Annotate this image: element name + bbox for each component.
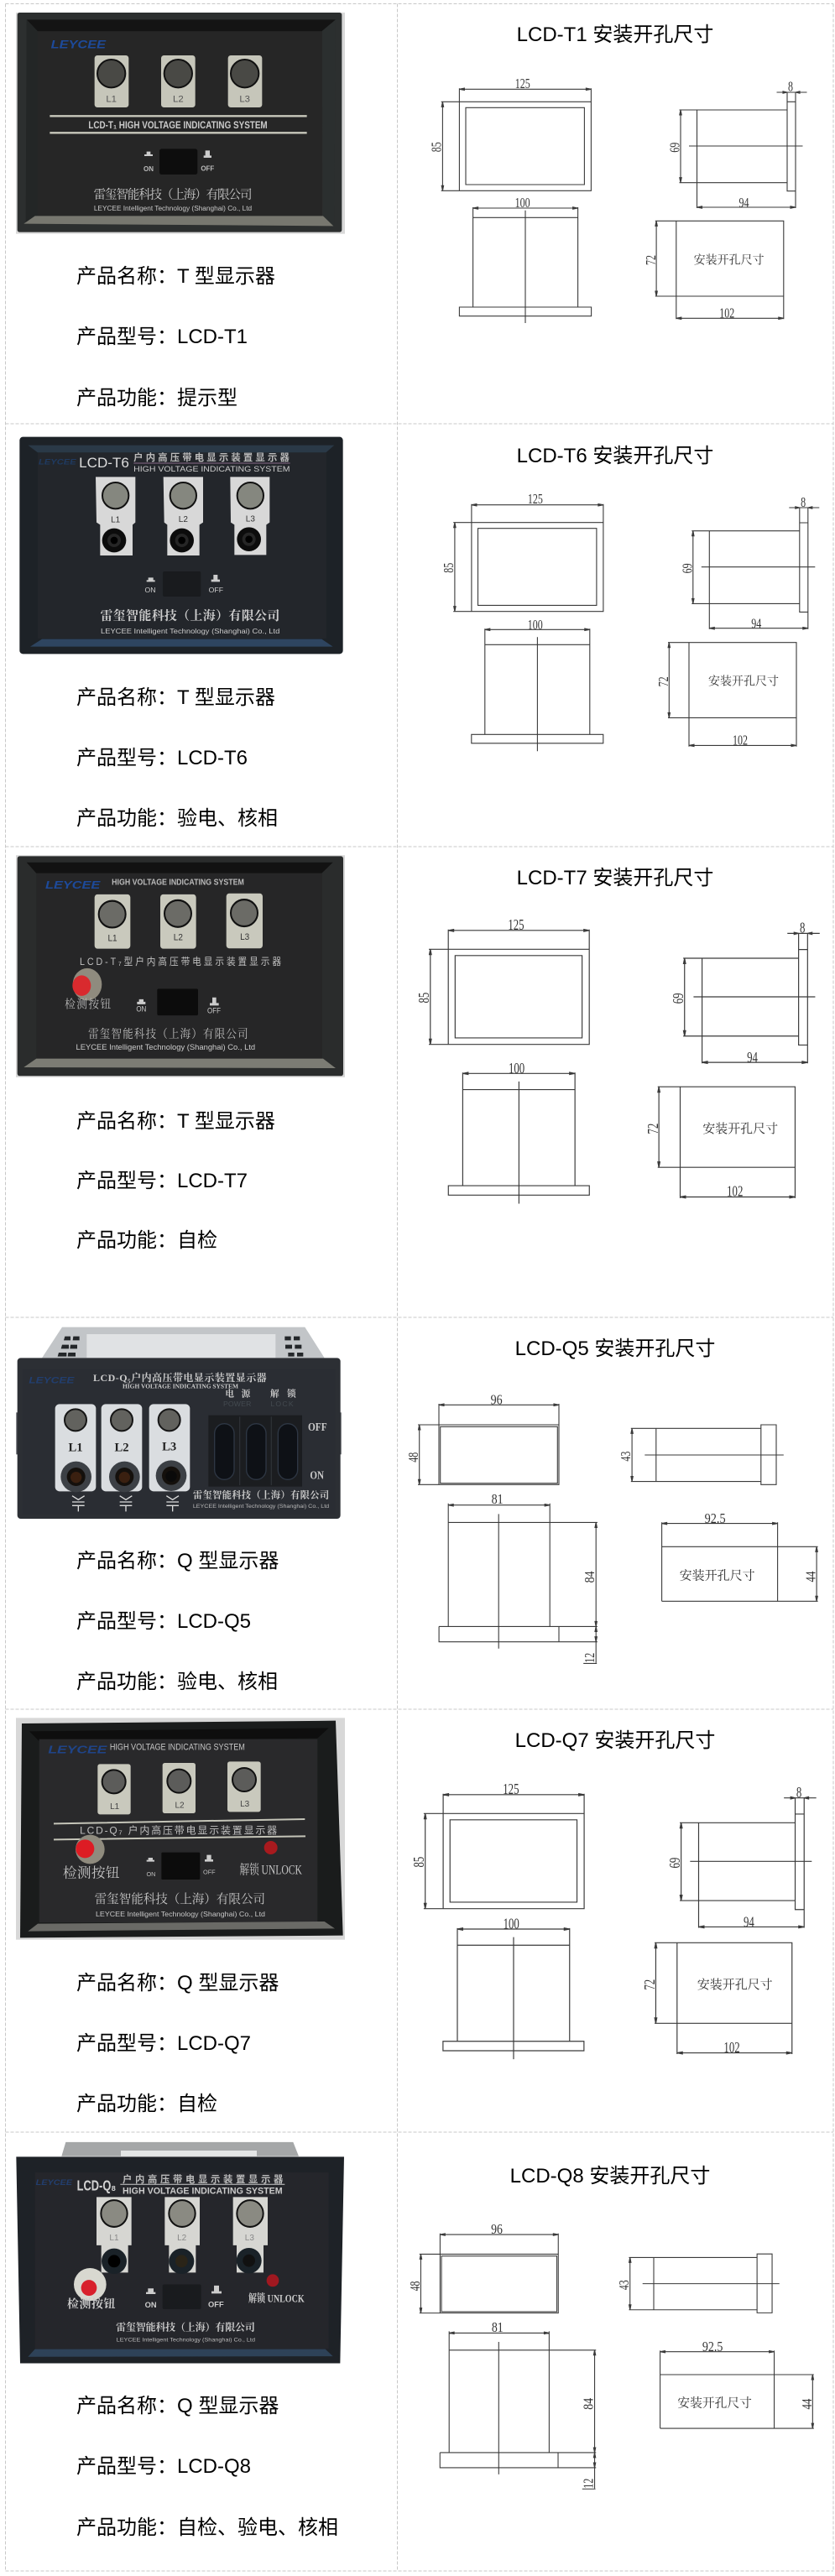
dimension drawing: LCD-T6: 安装开孔尺寸 bbox=[708, 673, 779, 690]
product photo: LCD-Q8: ON bbox=[145, 2300, 157, 2309]
dimension drawing: LCD-Q8: 92.5 bbox=[702, 2339, 723, 2354]
product photo: LCD-T6 bbox=[19, 437, 343, 654]
dimension drawing: LCD-Q5: 96 bbox=[491, 1391, 503, 1407]
dimension drawing: LCD-Q5: 92.5 bbox=[705, 1510, 726, 1526]
product photo: LCD-T7 bbox=[16, 855, 345, 1077]
product photo: LCD-T1: L1 bbox=[106, 95, 117, 105]
product info: LCD-T7 bbox=[76, 1104, 275, 1253]
dimension drawing: LCD-Q8: 81 bbox=[492, 2319, 504, 2335]
product info: LCD-Q8 bbox=[76, 2389, 338, 2540]
product photo: LCD-Q5: HIGH VOLTAGE INDICATING SYSTEM bbox=[123, 1383, 238, 1390]
dimension drawing: LCD-Q7: 85 bbox=[410, 1857, 427, 1868]
product photo: LCD-T1: 雷玺智能科技（上海）有限公司 bbox=[93, 188, 252, 202]
dimension drawing: LCD-Q8: 43 bbox=[616, 2280, 632, 2290]
product photo: LCD-T1: ON bbox=[144, 165, 154, 173]
product photo: LCD-T6: L1 bbox=[111, 515, 121, 524]
product photo: LCD-Q7: L1 bbox=[110, 1802, 120, 1812]
product info: LCD-Q7: 产品功能：自检 bbox=[76, 2087, 217, 2116]
product info: LCD-Q7: 产品型号：LCD-Q7 bbox=[76, 2026, 251, 2056]
dimension drawing: LCD-T1: 69 bbox=[666, 143, 683, 153]
product photo: LCD-Q5: 雷玺智能科技（上海）有限公司 bbox=[193, 1489, 329, 1500]
dimension drawing: LCD-T7: 8 bbox=[800, 920, 805, 936]
panel: LCD-T6 row bbox=[19, 437, 819, 831]
product photo: LCD-T6: 户内高压带电显示装置显示器 bbox=[133, 451, 290, 463]
dimension drawing: LCD-T7: 102 bbox=[727, 1183, 743, 1200]
heading: LCD-T6: LCD-T6 安装开孔尺寸 bbox=[517, 445, 713, 467]
heading: LCD-T7: LCD-T7 安装开孔尺寸 bbox=[517, 867, 713, 889]
product photo: LCD-Q5: L2 bbox=[114, 1441, 129, 1454]
heading: LCD-Q5: LCD-Q5 安装开孔尺寸 bbox=[515, 1338, 715, 1360]
product photo: LCD-T1: LEYCEE Intelligent Technology (Shanghai) Co., Ltd bbox=[94, 205, 252, 212]
dimension drawing: LCD-Q8: 48 bbox=[407, 2281, 423, 2291]
dimension drawing: LCD-Q5: 48 bbox=[405, 1452, 421, 1463]
product photo: LCD-T6: L3 bbox=[246, 515, 255, 524]
product photo: LCD-Q8: LEYCEE bbox=[36, 2177, 73, 2187]
dimension drawing: LCD-T6: 85 bbox=[441, 563, 457, 573]
dimension drawing: LCD-T6: 102 bbox=[733, 733, 748, 748]
product photo: LCD-Q5: POWER bbox=[223, 1400, 251, 1408]
product photo: LCD-T7: LCD-T₇型户内高压带电显示装置显示器 bbox=[80, 956, 281, 967]
product photo: LCD-Q5: OFF bbox=[308, 1421, 327, 1433]
dimension drawing: LCD-T6: 72 bbox=[655, 676, 671, 686]
product info: LCD-T6: 产品功能：验电、核相 bbox=[76, 801, 278, 831]
product photo: LCD-T1: OFF bbox=[201, 164, 214, 172]
product photo: LCD-T7: L2 bbox=[174, 932, 183, 943]
dimension drawing: LCD-Q8: 安装开孔尺寸 bbox=[677, 2393, 752, 2411]
product photo: LCD-Q7: OFF bbox=[203, 1868, 216, 1875]
product info: LCD-T7: 产品功能：自检 bbox=[76, 1223, 217, 1253]
dimension drawing: LCD-T7: 94 bbox=[747, 1049, 758, 1066]
dimension drawing: LCD-T7: 125 bbox=[508, 916, 524, 933]
dimension drawing: LCD-Q8: 96 bbox=[491, 2221, 503, 2237]
product info: LCD-T6: 产品名称：T 型显示器 bbox=[76, 681, 275, 710]
product info: LCD-Q7 bbox=[76, 1966, 279, 2116]
product info: LCD-T1 bbox=[76, 259, 275, 410]
dimension drawing: LCD-T6: 8 bbox=[801, 494, 806, 510]
product photo: LCD-Q7: LEYCEE bbox=[48, 1743, 108, 1755]
product photo: LCD-Q7 bbox=[16, 1718, 345, 1940]
dimension drawing: LCD-T6: 69 bbox=[679, 563, 695, 573]
dimension drawing: LCD-Q7: 安装开孔尺寸 bbox=[697, 1975, 773, 1993]
product photo: LCD-Q5 bbox=[16, 1327, 342, 1519]
product photo: LCD-Q8: LEYCEE Intelligent Technology (Shanghai) Co., Ltd bbox=[117, 2337, 255, 2344]
product photo: LCD-T7: L3 bbox=[240, 931, 249, 942]
dimension drawing: LCD-T1: 85 bbox=[429, 142, 445, 152]
dimension drawing: LCD-Q7: 94 bbox=[744, 1913, 754, 1930]
product photo: LCD-Q8: 雷玺智能科技（上海）有限公司 bbox=[116, 2321, 255, 2334]
product photo: LCD-Q5: L3 bbox=[162, 1441, 176, 1454]
dimension drawing: LCD-Q7 bbox=[410, 1781, 817, 2059]
heading: LCD-Q8: LCD-Q8 安装开孔尺寸 bbox=[510, 2165, 710, 2188]
product photo: LCD-Q8: 户内高压带电显示装置显示器 bbox=[123, 2173, 284, 2185]
product photo: LCD-T6: OFF bbox=[209, 586, 223, 594]
product info: LCD-Q8: 产品名称：Q 型显示器 bbox=[76, 2389, 279, 2418]
dimension drawing: LCD-T1: 8 bbox=[788, 78, 793, 94]
product photo: LCD-T1: LCD-T₁ HIGH VOLTAGE INDICATING SYSTEM bbox=[88, 119, 268, 131]
panel: LCD-T1 row bbox=[16, 13, 806, 410]
product photo: LCD-Q5: L1 bbox=[68, 1441, 83, 1454]
product info: LCD-Q5: 产品型号：LCD-Q5 bbox=[76, 1604, 251, 1634]
product photo: LCD-T7: ON bbox=[136, 1004, 146, 1014]
product photo: LCD-T7: OFF bbox=[207, 1006, 221, 1015]
dimension drawing: LCD-Q5: 12 bbox=[582, 1653, 598, 1663]
product photo: LCD-Q7: 解锁 UNLOCK bbox=[239, 1861, 302, 1877]
product photo: LCD-T7: LEYCEE Intelligent Technology (Shanghai) Co., Ltd bbox=[76, 1043, 255, 1051]
dimension drawing: LCD-T6: 100 bbox=[528, 617, 543, 633]
dimension drawing: LCD-T7 bbox=[415, 916, 820, 1203]
dimension drawing: LCD-T1: 102 bbox=[719, 305, 734, 321]
panel: LCD-T7 row bbox=[16, 855, 820, 1253]
dimension drawing: LCD-T1: 100 bbox=[515, 195, 530, 211]
dimension drawing: LCD-T6 bbox=[441, 491, 819, 751]
product photo: LCD-T6: HIGH VOLTAGE INDICATING SYSTEM bbox=[133, 465, 290, 473]
product photo: LCD-T7: 检测按钮 bbox=[65, 997, 111, 1011]
product photo: LCD-Q5: LOCK bbox=[270, 1400, 294, 1408]
product info: LCD-Q5 bbox=[76, 1544, 279, 1694]
heading: LCD-Q7: LCD-Q7 安装开孔尺寸 bbox=[515, 1729, 715, 1752]
dimension drawing: LCD-Q7: 8 bbox=[796, 1784, 801, 1801]
product photo: LCD-T6: LEYCEE Intelligent Technology (Shanghai) Co., Ltd bbox=[101, 627, 280, 635]
dimension drawing: LCD-Q8: 84 bbox=[581, 2397, 597, 2410]
product info: LCD-Q7: 产品名称：Q 型显示器 bbox=[76, 1966, 279, 1995]
product photo: LCD-T1: LEYCEE bbox=[51, 37, 107, 50]
dimension drawing: LCD-Q7: 100 bbox=[504, 1915, 519, 1932]
heading: LCD-T1: LCD-T1 安装开孔尺寸 bbox=[517, 23, 713, 46]
product photo: LCD-Q7: 雷玺智能科技（上海）有限公司 bbox=[95, 1892, 265, 1906]
product photo: LCD-Q7: 检测按钮 bbox=[63, 1865, 120, 1881]
product photo: LCD-Q7: L2 bbox=[175, 1801, 185, 1810]
product photo: LCD-Q8: 解锁 UNLOCK bbox=[248, 2292, 305, 2305]
product info: LCD-T7: 产品名称：T 型显示器 bbox=[76, 1104, 275, 1134]
dimension drawing: LCD-Q5: 84 bbox=[582, 1571, 598, 1583]
product photo: LCD-T7: 雷玺智能科技（上海）有限公司 bbox=[88, 1026, 248, 1040]
dimension drawing: LCD-Q8: 44 bbox=[799, 2398, 815, 2410]
product photo: LCD-Q8: OFF bbox=[208, 2300, 224, 2309]
product photo: LCD-T6: 雷玺智能科技（上海）有限公司 bbox=[100, 608, 279, 623]
product info: LCD-T1: 产品名称：T 型显示器 bbox=[76, 259, 275, 289]
product photo: LCD-Q7: HIGH VOLTAGE INDICATING SYSTEM bbox=[110, 1742, 245, 1752]
dimension drawing: LCD-T6: 94 bbox=[751, 616, 762, 632]
dimension drawing: LCD-T1 bbox=[429, 76, 807, 323]
product info: LCD-Q5: 产品功能：验电、核相 bbox=[76, 1665, 278, 1694]
product info: LCD-T7: 产品型号：LCD-T7 bbox=[76, 1164, 248, 1193]
panel: LCD-Q5 row bbox=[16, 1327, 819, 1694]
dimension drawing: LCD-T1: 安装开孔尺寸 bbox=[694, 251, 765, 268]
product photo: LCD-Q8 bbox=[16, 2142, 344, 2364]
dimension drawing: LCD-T7: 100 bbox=[509, 1060, 524, 1077]
product photo: LCD-Q7: L3 bbox=[240, 1800, 250, 1809]
product photo: LCD-Q8: HIGH VOLTAGE INDICATING SYSTEM bbox=[123, 2187, 283, 2197]
panel: LCD-Q7 row bbox=[16, 1718, 817, 2116]
dimension drawing: LCD-T7: 安装开孔尺寸 bbox=[702, 1119, 778, 1137]
product photo: LCD-Q7: ON bbox=[146, 1870, 155, 1878]
product photo: LCD-Q8: L3 bbox=[245, 2234, 254, 2243]
dimension drawing: LCD-Q5 bbox=[405, 1391, 819, 1663]
product photo: LCD-Q5: 电源 bbox=[225, 1389, 252, 1400]
dimension drawing: LCD-Q8 bbox=[407, 2221, 815, 2489]
dimension drawing: LCD-Q5: 安装开孔尺寸 bbox=[680, 1566, 755, 1583]
product photo: LCD-Q5: LCD-Q₅户内高压带电显示装置显示器 bbox=[93, 1371, 267, 1384]
product photo: LCD-Q7: LEYCEE Intelligent Technology (Shanghai) Co., Ltd bbox=[96, 1910, 265, 1918]
dimension drawing: LCD-T1: 125 bbox=[515, 76, 530, 91]
product photo: LCD-Q5: LEYCEE bbox=[29, 1376, 75, 1386]
product photo: LCD-Q8: 检测按钮 bbox=[67, 2297, 115, 2312]
dimension drawing: LCD-T6: 125 bbox=[528, 491, 543, 507]
dimension drawing: LCD-Q8: 12 bbox=[581, 2479, 597, 2489]
product photo: LCD-Q8: L2 bbox=[177, 2234, 187, 2243]
product info: LCD-T6 bbox=[76, 681, 278, 831]
product info: LCD-Q8: 产品功能：自检、验电、核相 bbox=[76, 2511, 338, 2540]
product info: LCD-T1: 产品功能：提示型 bbox=[76, 381, 237, 410]
dimension drawing: LCD-Q5: 81 bbox=[492, 1491, 504, 1507]
product photo: LCD-T1: L2 bbox=[173, 95, 184, 105]
dimension drawing: LCD-T7: 72 bbox=[645, 1124, 661, 1134]
product photo: LCD-Q7: LCD-Q₇ 户内高压带电显示装置显示器 bbox=[80, 1823, 277, 1836]
product photo: LCD-T6: LCD-T6 bbox=[79, 455, 129, 471]
product photo: LCD-T7: L1 bbox=[107, 933, 117, 944]
product photo: LCD-Q5: ON bbox=[310, 1469, 324, 1482]
product photo: LCD-T6: L2 bbox=[179, 515, 188, 524]
product photo: LCD-T7: LEYCEE bbox=[45, 879, 101, 891]
dimension drawing: LCD-Q7: 69 bbox=[666, 1858, 683, 1869]
product info: LCD-Q8: 产品型号：LCD-Q8 bbox=[76, 2449, 251, 2479]
dimension drawing: LCD-T7: 69 bbox=[670, 993, 686, 1004]
product photo: LCD-T1: L3 bbox=[239, 95, 250, 105]
product photo: LCD-Q5: 解锁 bbox=[270, 1389, 297, 1400]
product photo: LCD-Q8: L1 bbox=[109, 2234, 119, 2243]
panel: LCD-Q8 row bbox=[16, 2142, 815, 2540]
dimension drawing: LCD-Q5: 44 bbox=[803, 1571, 819, 1583]
dimension drawing: LCD-Q7: 102 bbox=[723, 2039, 740, 2056]
dimension drawing: LCD-Q7: 72 bbox=[641, 1979, 658, 1990]
product photo: LCD-T7: HIGH VOLTAGE INDICATING SYSTEM bbox=[112, 878, 244, 888]
product photo: LCD-T6: LEYCEE bbox=[39, 457, 77, 466]
dimension drawing: LCD-Q7: 125 bbox=[503, 1781, 519, 1797]
product info: LCD-T1: 产品型号：LCD-T1 bbox=[76, 320, 248, 349]
dimension drawing: LCD-Q5: 43 bbox=[618, 1452, 634, 1462]
product photo: LCD-T1 bbox=[16, 13, 345, 234]
dimension drawing: LCD-T1: 94 bbox=[738, 195, 749, 211]
product photo: LCD-Q8: LCD-Q₈ bbox=[77, 2177, 116, 2193]
dimension drawing: LCD-T7: 85 bbox=[415, 993, 432, 1004]
product photo: LCD-Q5: LEYCEE Intelligent Technology (Shanghai) Co., Ltd bbox=[193, 1504, 330, 1510]
dimension drawing: LCD-T1: 72 bbox=[643, 255, 659, 265]
product photo: LCD-T6: ON bbox=[145, 586, 155, 594]
product info: LCD-T6: 产品型号：LCD-T6 bbox=[76, 741, 248, 770]
product info: LCD-Q5: 产品名称：Q 型显示器 bbox=[76, 1544, 279, 1573]
